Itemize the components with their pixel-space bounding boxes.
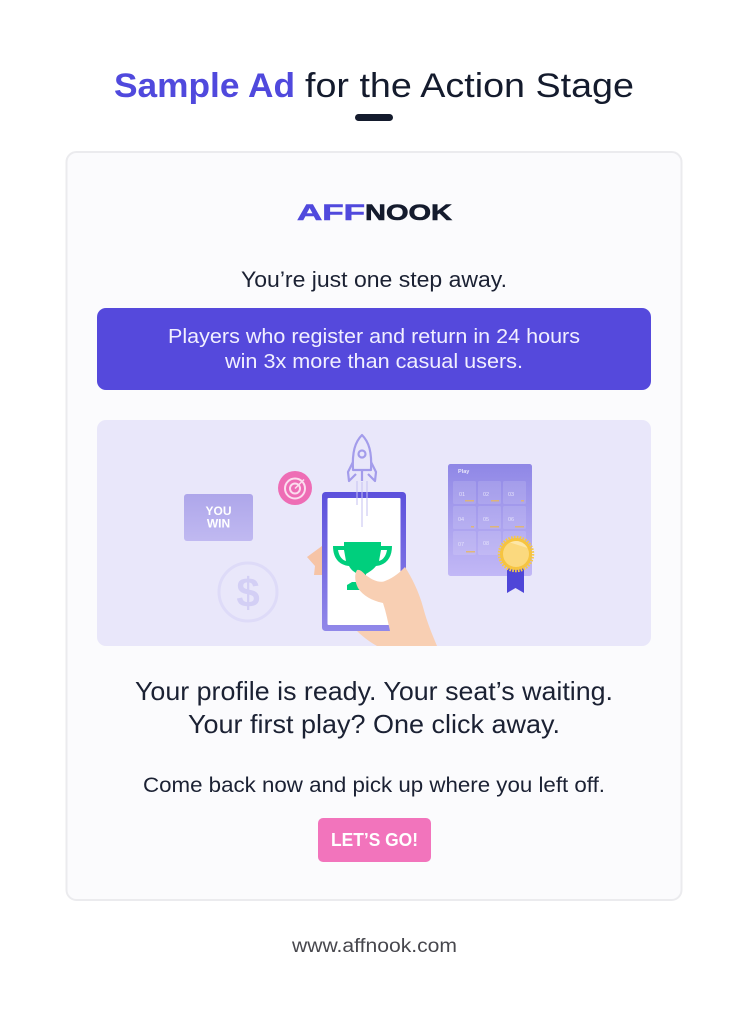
panel: play card: 03	[508, 492, 514, 498]
panel: play card	[448, 464, 532, 576]
banner: statistic: win 3x more than casual users.	[224, 351, 523, 373]
text: profile ready headline	[135, 676, 613, 739]
text: one step away: You’re just one step away.	[241, 267, 507, 292]
text: come back: Come back now and pick up where you left off.	[143, 774, 605, 797]
title: Sample Ad	[114, 67, 295, 105]
button: let's go: LET’S GO!	[331, 830, 418, 850]
icon: gold seal	[500, 538, 532, 570]
panel: play card: 08	[483, 541, 489, 547]
icon: fingers behind phone	[307, 546, 322, 575]
panel: play card: 05	[483, 517, 489, 523]
icon: you win card	[184, 494, 253, 541]
icon: dollar coin	[219, 563, 277, 621]
icon: you win card: YOU	[205, 504, 232, 518]
text: profile ready headline: Your profile is ready. Your seat’s waiting.	[135, 676, 613, 706]
panel: play card: 07	[458, 542, 464, 548]
text: profile ready headline: Your first play? One click away.	[188, 709, 560, 739]
icon: rocket	[348, 435, 376, 527]
icon: phone	[322, 492, 406, 631]
icon: ribbon	[507, 568, 524, 593]
icon: dollar coin: $	[236, 569, 260, 616]
panel: illustration	[97, 420, 651, 646]
button: let's go	[318, 818, 431, 862]
panel: play card: 06	[508, 517, 514, 523]
footer url: www.affnook.com	[291, 936, 457, 957]
title	[114, 67, 634, 105]
panel: play card: Play	[458, 469, 470, 475]
icon: trophy	[333, 542, 392, 590]
icon: hand	[355, 567, 437, 646]
icon: you win card: WIN	[207, 516, 230, 530]
panel: play card: 04	[458, 517, 464, 523]
panel: play card: 01	[459, 492, 465, 498]
icon: target	[278, 471, 312, 505]
title underline	[355, 114, 393, 121]
title: for the Action Stage	[305, 67, 634, 105]
logo: Affnook: AFF	[297, 200, 365, 225]
banner: statistic	[97, 308, 651, 390]
panel: play card: 02	[483, 492, 489, 498]
panel: ad card	[66, 152, 682, 900]
banner: statistic: Players who register and return in 24 hours	[168, 326, 580, 348]
logo: Affnook: NOOK	[365, 200, 452, 225]
logo: Affnook	[297, 200, 452, 225]
